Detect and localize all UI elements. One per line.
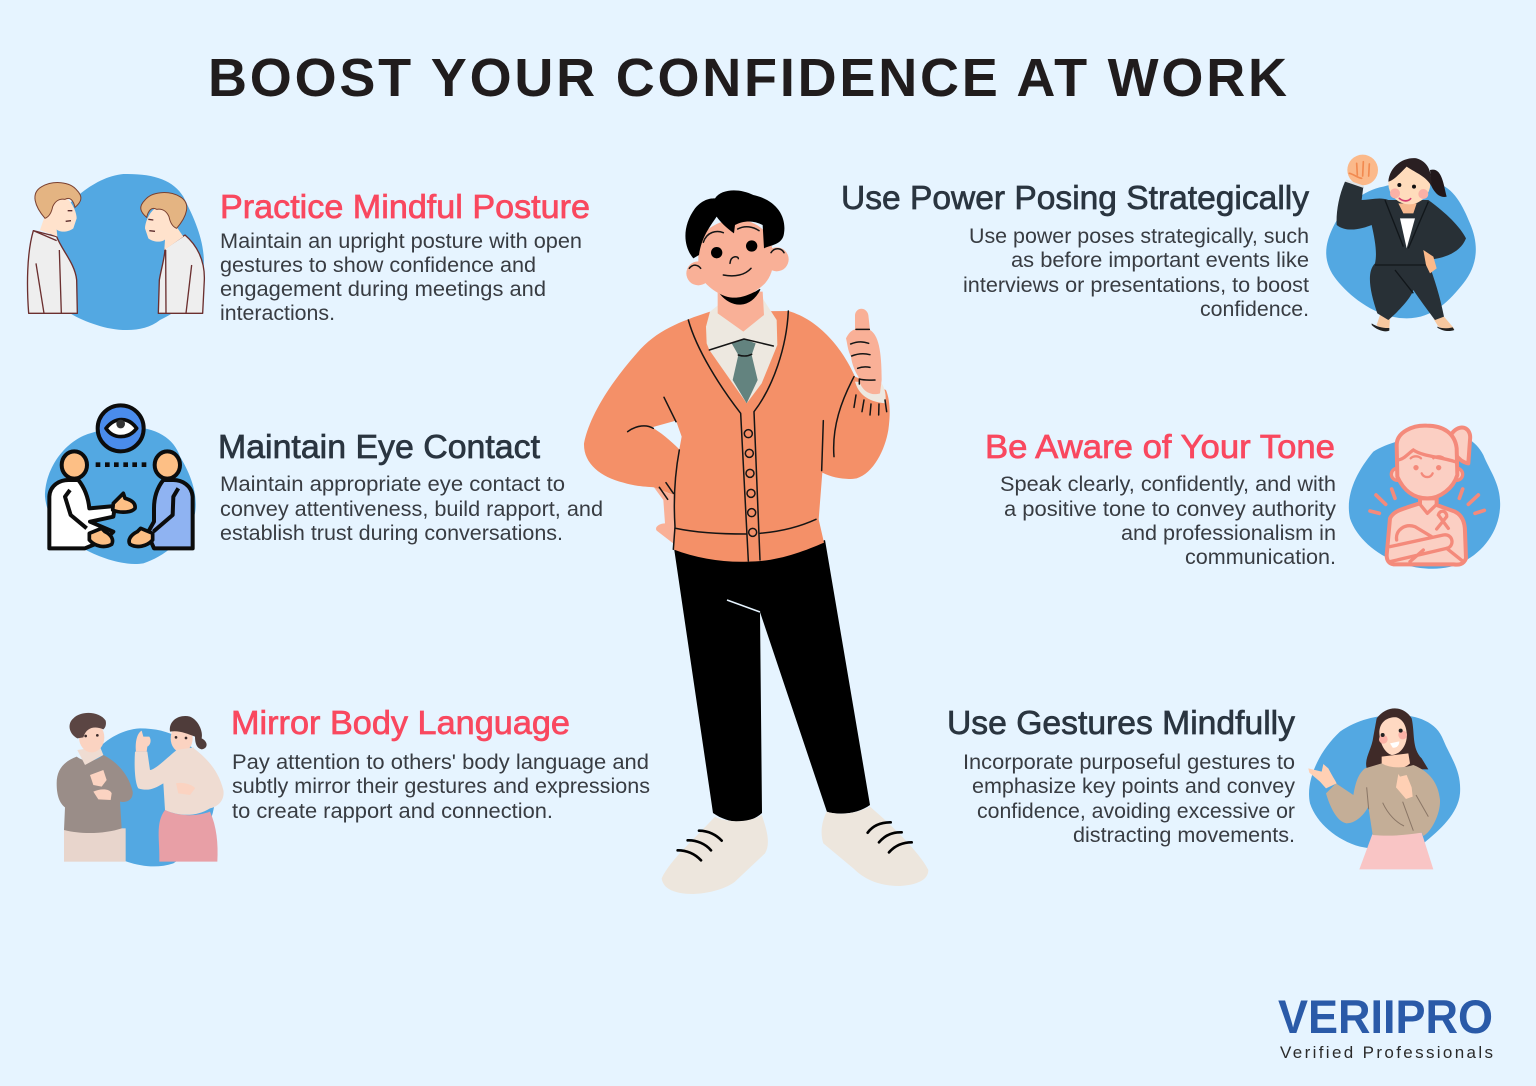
icon: eye contact between two people bbox=[45, 405, 196, 564]
text block: power posing bbox=[963, 224, 1309, 321]
heading: Use Power Posing Strategically: Use Power Posing Strategically bbox=[841, 179, 1310, 216]
text block: tone: a positive tone to convey authority bbox=[1004, 497, 1336, 521]
text block: tone: communication. bbox=[1185, 545, 1336, 569]
text block: gestures: confidence, avoiding excessive or bbox=[977, 799, 1295, 823]
text block: tone: and professionalism in bbox=[1121, 521, 1336, 545]
text block: eye contact: Maintain appropriate eye contact to bbox=[220, 472, 565, 496]
text block: mirror body language bbox=[232, 750, 650, 823]
icon: woman with crossed arms bbox=[1349, 426, 1500, 569]
text block: gestures bbox=[963, 750, 1295, 847]
text block: power posing: Use power poses strategically, such bbox=[969, 224, 1309, 248]
heading: Use Gestures Mindfully: Use Gestures Mindfully bbox=[947, 704, 1296, 741]
text block: mindful posture bbox=[220, 229, 582, 325]
figure trousers bbox=[674, 540, 870, 822]
heading: Practice Mindful Posture: Practice Mindful Posture bbox=[220, 188, 590, 225]
text block: gestures: Incorporate purposeful gestures to bbox=[963, 750, 1295, 774]
text block: gestures: distracting movements. bbox=[1073, 823, 1295, 847]
logo: VERIIPRO Verified Professionals: Verified Professionals bbox=[1280, 1043, 1493, 1062]
text block: mindful posture: gestures to show confidence and bbox=[220, 253, 536, 277]
text block: mindful posture: Maintain an upright posture with open bbox=[220, 229, 582, 253]
text block: mirror body language: Pay attention to others' body language and bbox=[232, 750, 649, 774]
figure shoes bbox=[662, 807, 928, 894]
text block: mindful posture: engagement during meetings and bbox=[220, 277, 546, 301]
heading: Maintain Eye Contact: Maintain Eye Contact bbox=[218, 428, 540, 465]
text block: mirror body language: to create rapport and connection. bbox=[232, 799, 553, 823]
logo: VERIIPRO Verified Professionals: VERIIPRO bbox=[1278, 990, 1493, 1043]
text block: power posing: interviews or presentations, to boost bbox=[963, 273, 1309, 297]
text block: power posing: as before important events like bbox=[1011, 248, 1309, 272]
text block: mirror body language: subtly mirror their gestures and expressions bbox=[232, 774, 650, 798]
heading: Be Aware of Your Tone: Be Aware of Your Tone bbox=[985, 428, 1335, 465]
title: BOOST YOUR CONFIDENCE AT WORK bbox=[208, 48, 1287, 108]
text block: eye contact bbox=[220, 472, 603, 545]
icon: businesswoman in power pose bbox=[1326, 155, 1476, 331]
text block: mindful posture: interactions. bbox=[220, 301, 335, 325]
icon: man and woman mirroring gestures bbox=[57, 713, 224, 866]
text block: eye contact: establish trust during conversations. bbox=[220, 521, 563, 545]
icon: woman gesturing with open hand bbox=[1308, 708, 1460, 869]
text block: eye contact: convey attentiveness, build rapport, and bbox=[220, 497, 603, 521]
text block: gestures: emphasize key points and convey bbox=[972, 774, 1295, 798]
text block: tone: Speak clearly, confidently, and with bbox=[1000, 472, 1336, 496]
heading: Mirror Body Language: Mirror Body Language bbox=[231, 704, 570, 741]
text block: tone bbox=[1000, 472, 1336, 569]
figure torso, cardigan, arms and head bbox=[584, 190, 890, 562]
central figure: confident man giving thumbs up bbox=[584, 190, 928, 894]
text block: power posing: confidence. bbox=[1200, 297, 1309, 321]
icon: two men facing each other bbox=[28, 174, 204, 330]
